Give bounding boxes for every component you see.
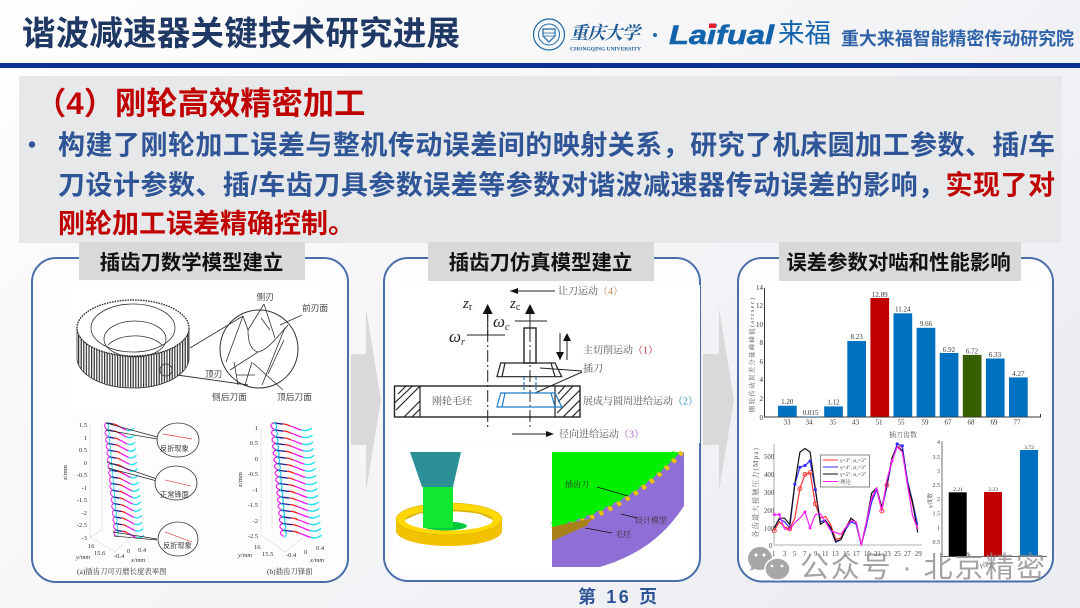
category labels: 68 (968, 418, 975, 426)
bars (778, 298, 1028, 417)
category labels: 77 (1014, 418, 1021, 426)
gear diagram (70, 283, 328, 408)
axis ticks: 4 (760, 376, 764, 384)
line chart legend (820, 455, 870, 487)
plot captions (77, 567, 313, 576)
3D plot a: 16 (88, 543, 95, 550)
line chart legend: γ=5°, α₁=3° (839, 471, 866, 478)
gear callout labels (205, 291, 328, 402)
3D plot b: -2.5 (248, 533, 258, 540)
axis symbols: ω (449, 327, 461, 346)
line chart: contact stress (750, 442, 922, 558)
value labels: 11.24 (895, 306, 911, 314)
category labels: 59 (922, 418, 929, 426)
3D plot b: 1 (255, 425, 258, 432)
axis ticks: 2 (760, 395, 764, 403)
line chart peak markers (772, 471, 889, 533)
magenta series (774, 447, 918, 545)
line chart ticks: 11 (822, 551, 829, 558)
3D plot b: 0.4 (316, 545, 325, 552)
value labels: 12.89 (872, 291, 888, 299)
value labels: 8.23 (850, 333, 863, 341)
heading: 误差参数对啮和性能影响 (786, 250, 1011, 274)
line chart ticks (764, 454, 922, 558)
3D plot a: -2 (82, 510, 87, 517)
bar chart: gamma angle: 2.5 (932, 483, 940, 489)
line chart ticks: 0 (769, 543, 773, 550)
header rule (0, 63, 1080, 68)
bar chart: gamma angle: 2.21 (953, 487, 963, 493)
white figure area (746, 281, 1046, 573)
axis ticks: 8 (760, 339, 764, 347)
heading (779, 242, 1021, 281)
university name: CHONGQING UNIVERSITY (570, 46, 641, 52)
3D plot a: 0.4 (138, 547, 147, 554)
cutter blue overlay (497, 377, 562, 407)
kinematic diagram (394, 284, 700, 443)
line chart ticks: 29 (915, 551, 922, 558)
category labels: 34 (806, 418, 813, 426)
value labels: 0.015 (803, 409, 819, 417)
heading: 插齿刀仿真模型建立 (449, 250, 632, 274)
axis ticks: 6 (760, 358, 764, 366)
separator dot (653, 33, 657, 37)
section heading: （4）刚轮高效精密加工 (35, 86, 365, 121)
tooth engagement image (524, 446, 690, 572)
bar chart: gamma angle (926, 440, 1047, 569)
callout bubbles: 正常锋面 (160, 490, 189, 499)
category labels: 51 (876, 418, 883, 426)
line chart ticks: 15 (843, 551, 850, 558)
来福: 来福 (778, 18, 831, 48)
3D plot a: 0.5 (79, 447, 87, 454)
3D plot b: -1.5 (248, 502, 258, 509)
panel: error parameter effects (738, 242, 1053, 582)
3D plot b: 0 (255, 456, 258, 463)
line chart legend: γ=3°, α₁=3° (839, 457, 866, 464)
3D plot a: 15.6 (94, 550, 106, 557)
line chart ticks: 7 (803, 551, 807, 558)
value labels: 6.92 (943, 346, 956, 354)
3D plot a: x/mm (130, 557, 145, 564)
plot captions: (a)插齿刀可刃磨长度表率图 (77, 567, 167, 576)
bar chart: gamma angle: 2 (937, 497, 940, 503)
red series (774, 447, 918, 545)
category labels (784, 418, 1021, 426)
heading (79, 242, 305, 280)
tooth engagement image: 插齿刀 (565, 479, 589, 489)
bar chart: gamma angle: 3.72 (1024, 445, 1034, 451)
line chart: contact stress: 各齿最大接触压力(Mpa) (750, 448, 760, 538)
icon: WeChat (748, 547, 790, 580)
3D plot b: y/mm (237, 552, 252, 559)
icon: Chongqing University seal (534, 19, 564, 50)
axis symbols: c (505, 322, 510, 333)
3D plot b: 0.5 (250, 440, 258, 447)
motion labels: 插刀 (583, 362, 603, 375)
line chart ticks: 19 (864, 551, 871, 558)
3D plot b: 15.5 (262, 551, 273, 558)
line chart ticks: 500 (764, 454, 775, 461)
panel: cutter simulation model (384, 242, 700, 581)
gear callout labels: 前刃面 (302, 302, 328, 313)
page number: 第 16 页 (578, 586, 657, 607)
axis symbols: z (463, 296, 469, 312)
line chart ticks: 21 (874, 551, 881, 558)
category labels: 33 (784, 418, 791, 426)
bar chart: tooth count vs error: 插刀齿数 (889, 430, 917, 439)
gear callout labels: 侧刃 (256, 291, 274, 302)
motion labels: 展成与圆周进给运动（2） (583, 394, 698, 408)
tooth engagement image: 设计模型 (635, 515, 667, 525)
3D plot a: -0.4 (114, 553, 125, 560)
bullet dot (29, 141, 35, 148)
plot captions: (b)插齿刀锋面 (267, 567, 313, 576)
panel: summary text (19, 76, 1062, 243)
bar chart: gamma angle: 3 (937, 469, 940, 475)
category labels: 69 (990, 418, 998, 426)
wordmark red accent (709, 24, 716, 28)
category labels: 67 (944, 418, 952, 426)
bar chart: gamma angle: 1 (937, 526, 940, 532)
3D plot b: 16 (254, 544, 261, 551)
3D plot b: -0.5 (248, 471, 258, 478)
axis ticks: 12 (756, 302, 764, 310)
gear callout labels: 侧后刀面 (212, 391, 247, 402)
institute name: 重大来福智能精密传动研究院 (841, 28, 1074, 49)
3D cutting model (394, 446, 524, 572)
motion arrowheads (483, 288, 571, 437)
value labels: 9.66 (920, 320, 933, 328)
line chart ticks: 1 (772, 551, 775, 558)
3D plot a: -0.5 (77, 472, 87, 479)
axis ticks: 10 (756, 321, 764, 329)
watermark (748, 547, 1045, 584)
line chart ticks: 9 (814, 551, 818, 558)
line chart legend: 理论 (840, 478, 852, 486)
university name: 重庆大学 (570, 23, 643, 43)
line chart ticks: 300 (764, 490, 775, 497)
3D plot b: z/mm (237, 472, 244, 487)
axis ticks (756, 284, 764, 422)
arrow: step two to three (703, 308, 734, 491)
page title: 谐波减速器关键技术研究进展 (22, 16, 460, 53)
3D plot a: -1.5 (77, 497, 87, 504)
3D plot a: 0 (127, 548, 130, 555)
axis titles: 刚轮传动误差分量峰峰值(arcsec) (747, 298, 756, 412)
3D plot a (62, 422, 157, 564)
bar chart: gamma angle: 2.23 (988, 487, 998, 493)
line chart ticks: 23 (884, 551, 891, 558)
3D plot b: -2 (253, 518, 258, 525)
3D plot a: -2.5 (77, 522, 87, 529)
summary line 2: 刀设计参数、插/车齿刀具参数误差等参数对谐波减速器传动误差的影响，实现了对 (58, 170, 1055, 200)
header logos (534, 18, 1074, 52)
value labels: 1.20 (781, 398, 794, 406)
line chart ticks: 5 (793, 551, 797, 558)
heading (428, 242, 654, 281)
value labels: 6.72 (966, 348, 979, 356)
3D plot b: 0 (304, 549, 307, 556)
bar chart: gamma angle: 3.5 (932, 455, 940, 461)
axis ticks: 14 (756, 284, 764, 292)
line chart ticks: 200 (764, 508, 775, 515)
axis symbols (449, 296, 521, 348)
line chart ticks: 100 (764, 526, 775, 533)
motion labels (432, 284, 698, 440)
tooth engagement image: 毛坯 (615, 529, 632, 539)
axis symbols: r (461, 337, 465, 348)
category labels: 43 (852, 418, 860, 426)
category labels: 35 (830, 418, 837, 426)
3D plot b (237, 423, 325, 564)
line chart legend: γ=4°, α₁=3° (839, 464, 866, 471)
gear callout labels: 顶刃 (205, 369, 222, 379)
axis symbols: ω (493, 312, 505, 331)
line chart ticks: 27 (904, 551, 911, 558)
value labels (781, 291, 1025, 417)
motion labels: 让刀运动（4） (558, 284, 623, 298)
3D plot a: 0 (84, 460, 87, 467)
university name (570, 23, 643, 52)
axis symbols: z (510, 296, 516, 312)
callout bubbles: 反折现象 (160, 444, 189, 453)
black series (774, 447, 918, 545)
motion labels: 刚轮毛坯 (432, 394, 473, 408)
summary line 3: 刚轮加工误差精确控制。 (58, 209, 355, 239)
bar chart: gamma angle: 1.5 (932, 512, 940, 518)
heading: 插齿刀数学模型建立 (100, 250, 283, 274)
line chart ticks: 25 (894, 551, 901, 558)
3D plot b: x/mm (309, 557, 324, 564)
bar chart: gamma angle: 0.5 (932, 540, 940, 546)
bar chart: tooth count vs error (747, 284, 1040, 439)
line chart ticks: 13 (832, 551, 839, 558)
category labels: 55 (898, 418, 905, 426)
blue series (774, 444, 918, 545)
value labels: 6.33 (989, 351, 1002, 359)
axis symbols: r (469, 302, 473, 313)
axis ticks: 0 (760, 414, 764, 422)
gear callout labels: 顶后刀面 (277, 392, 312, 402)
bar chart: gamma angle: γ误差 (979, 561, 995, 569)
3D plot a: 1 (84, 435, 87, 442)
summary line 1: 构建了刚轮加工误差与整机传动误差间的映射关系，研究了机床圆加工参数、插/车 (58, 130, 1055, 160)
3D plot a: 1.5 (79, 422, 87, 429)
motion labels: 径向进给运动（3） (559, 428, 644, 440)
value labels: 1.12 (827, 398, 840, 406)
panel: cutter math model (32, 242, 348, 582)
arrow: step one to two (351, 308, 381, 491)
bar chart: gamma angle: γ/度数 (926, 493, 934, 509)
3D plot a: y/mm (75, 554, 90, 561)
3D plot b: -1 (253, 487, 258, 494)
line chart ticks: 17 (853, 551, 860, 558)
3D plot a: z/mm (62, 465, 69, 480)
watermark text: 公众号 · 北京精密 (800, 551, 1045, 584)
3D plot b: -0.4 (286, 552, 297, 559)
3D plot a: -1 (82, 485, 87, 492)
motion labels: 主切削运动（1） (583, 344, 658, 356)
axis symbols: c (516, 302, 521, 313)
Laifual wordmark: Laifual (669, 20, 775, 50)
line chart ticks: 400 (764, 472, 775, 479)
callout bubbles: 反折现象 (163, 541, 192, 550)
line chart ticks: 3 (783, 551, 787, 558)
callout bubbles (155, 423, 199, 556)
3D plot a: -3 (82, 535, 87, 542)
value labels: 4.27 (1012, 370, 1025, 378)
bar chart: gamma angle: 4 (937, 440, 940, 446)
